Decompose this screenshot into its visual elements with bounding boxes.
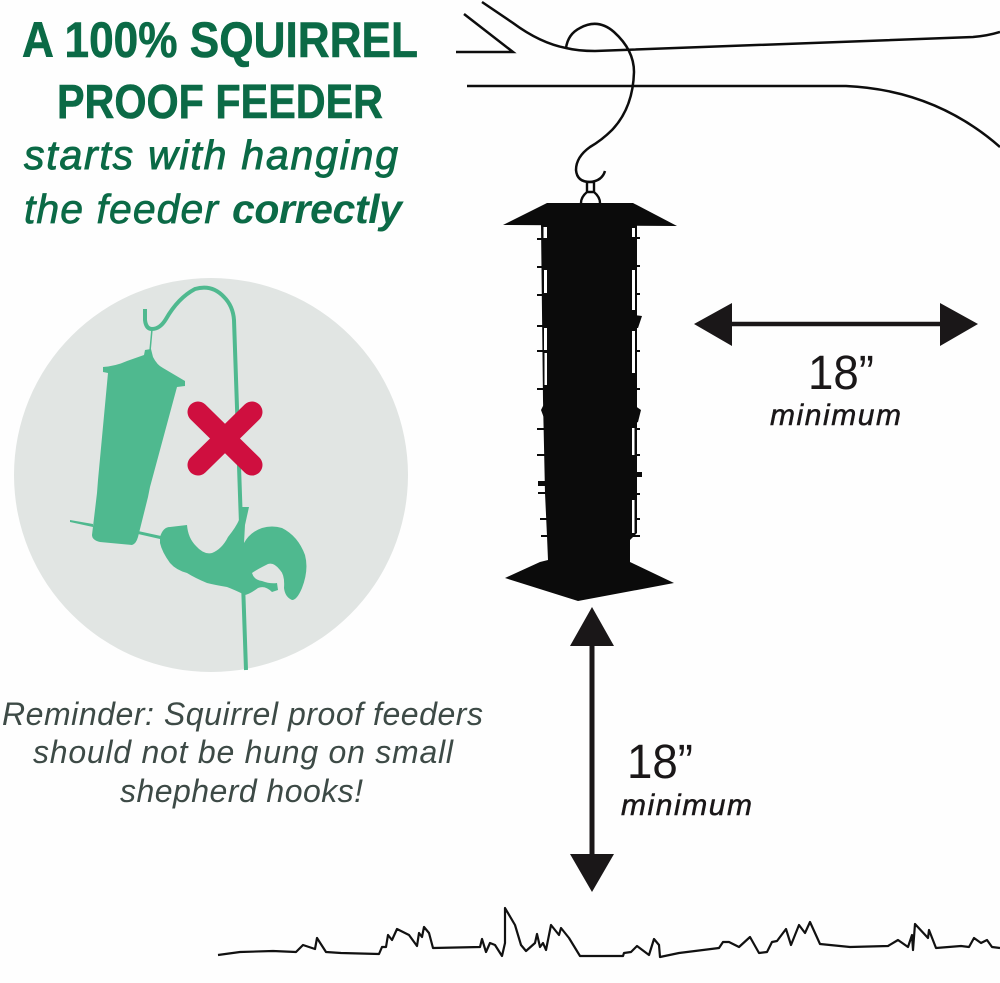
hanging feeder silhouette xyxy=(503,182,677,601)
feeder cage gaps xyxy=(544,227,635,533)
side distance value: 18” xyxy=(808,347,874,400)
feeder roof xyxy=(503,203,677,226)
arrow: ground clearance xyxy=(570,607,614,892)
metal hook xyxy=(566,24,634,182)
reminder text xyxy=(2,696,483,809)
reminder line 3: shepherd hooks! xyxy=(120,773,363,809)
measurement label: side xyxy=(770,347,901,432)
subheading word: correctly: correctly xyxy=(232,186,404,232)
ground minimum label: minimum xyxy=(621,789,752,822)
panel background circle xyxy=(14,278,408,672)
subheading line 1: starts with hanging xyxy=(24,132,398,178)
icon: hanging wire xyxy=(150,329,152,351)
heading line 2: PROOF FEEDER xyxy=(57,76,383,129)
feeder body xyxy=(505,225,674,601)
feeder ornaments xyxy=(538,315,642,486)
ground distance value: 18” xyxy=(627,736,693,789)
reminder line 2: should not be hung on small xyxy=(33,734,454,770)
tree branch xyxy=(456,2,1000,147)
ground grass line xyxy=(218,908,1000,957)
feeder perches xyxy=(537,238,640,536)
reminder line 1: Reminder: Squirrel proof feeders xyxy=(2,696,483,732)
side minimum label: minimum xyxy=(770,399,901,432)
arrow: side clearance xyxy=(694,303,978,346)
measurement label: ground xyxy=(621,736,752,822)
icon: tilted feeder xyxy=(92,349,185,545)
icon: squirrel xyxy=(160,507,306,600)
subheading words: the feeder: the feeder xyxy=(24,186,220,232)
panel: incorrect shepherd hook example xyxy=(14,278,408,672)
heading line 1: A 100% SQUIRREL xyxy=(22,12,418,68)
feeder hanger loop xyxy=(581,182,600,203)
subheading line 2 xyxy=(24,186,404,232)
heading xyxy=(22,12,418,232)
icon: feeder perch xyxy=(70,520,161,539)
icon: shepherd hook xyxy=(145,288,246,670)
icon: red cross xyxy=(198,412,252,465)
